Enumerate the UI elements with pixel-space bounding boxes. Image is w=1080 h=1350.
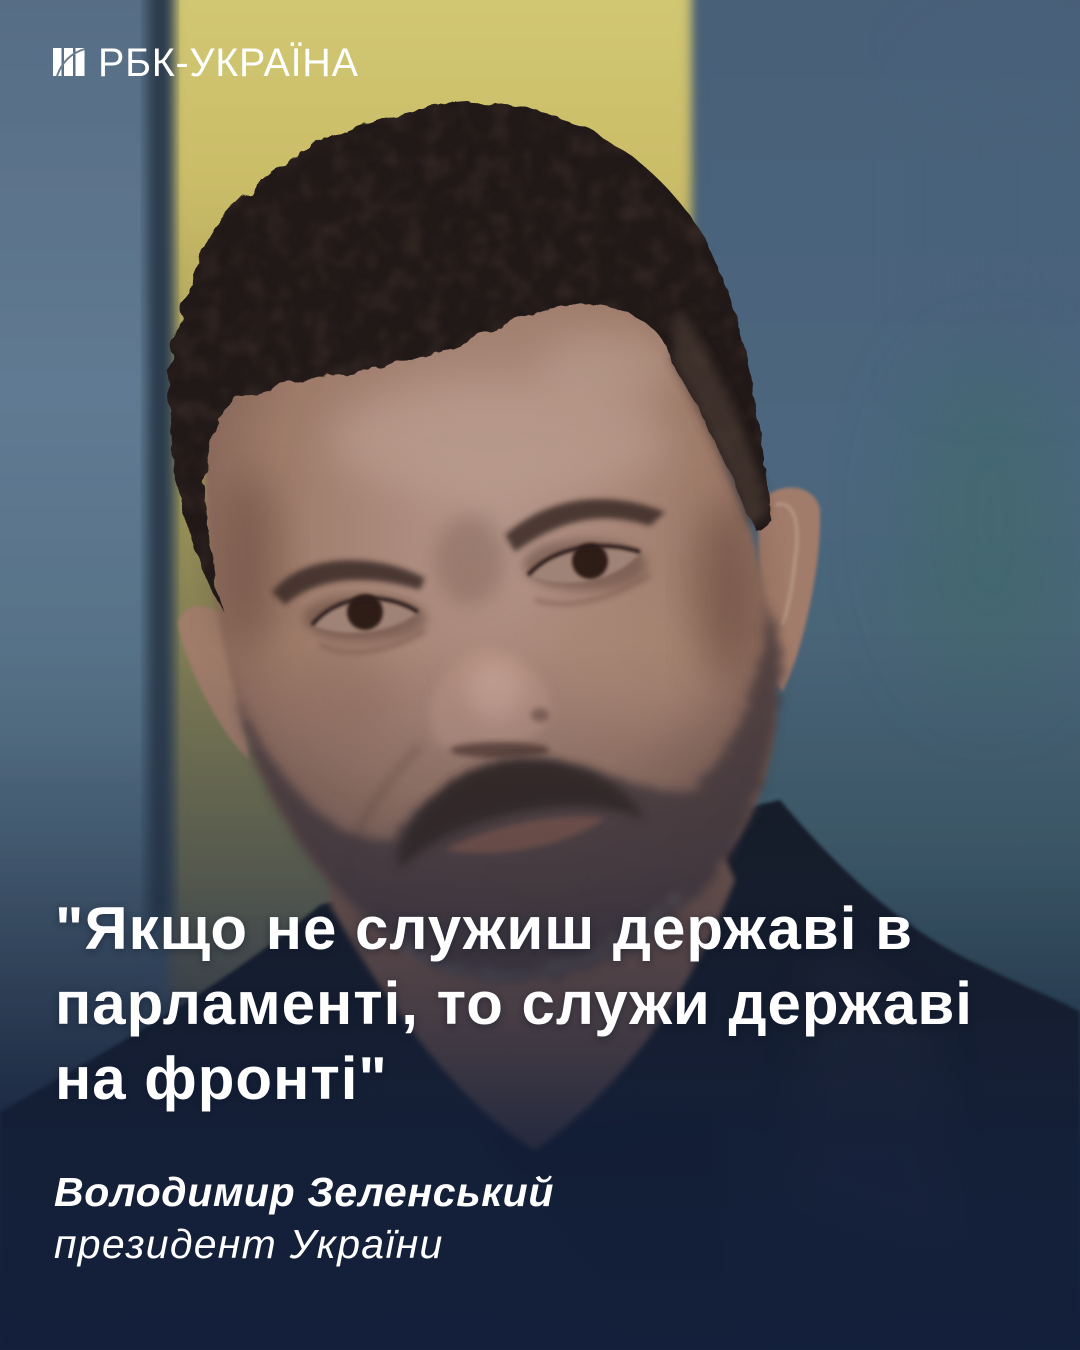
quote heading: парламенті, то служи державі: [55, 970, 973, 1037]
facial highlights and shadows: [220, 330, 755, 880]
ears: [178, 488, 820, 760]
eyes: [303, 539, 650, 652]
logo wordmark: РБК-УКРАЇНА: [98, 41, 359, 85]
icon: logo mark: [53, 48, 85, 76]
quote heading: [55, 895, 973, 1112]
nose: [430, 649, 551, 758]
face: [204, 270, 776, 964]
faded hair on the temple: [672, 310, 768, 525]
shirt and shoulders: [0, 800, 1080, 1350]
neck: [330, 800, 735, 1150]
beard and moustache: [235, 600, 783, 982]
quote heading: "Якщо не служиш державі в: [55, 895, 913, 962]
attribution role: президент України: [54, 1221, 444, 1267]
logo: РБК-Україна: [53, 41, 359, 85]
attribution name: Володимир Зеленський: [54, 1169, 554, 1215]
hair: [169, 102, 770, 610]
quote heading: на фронті": [55, 1045, 388, 1112]
eyebrows: [272, 499, 665, 605]
